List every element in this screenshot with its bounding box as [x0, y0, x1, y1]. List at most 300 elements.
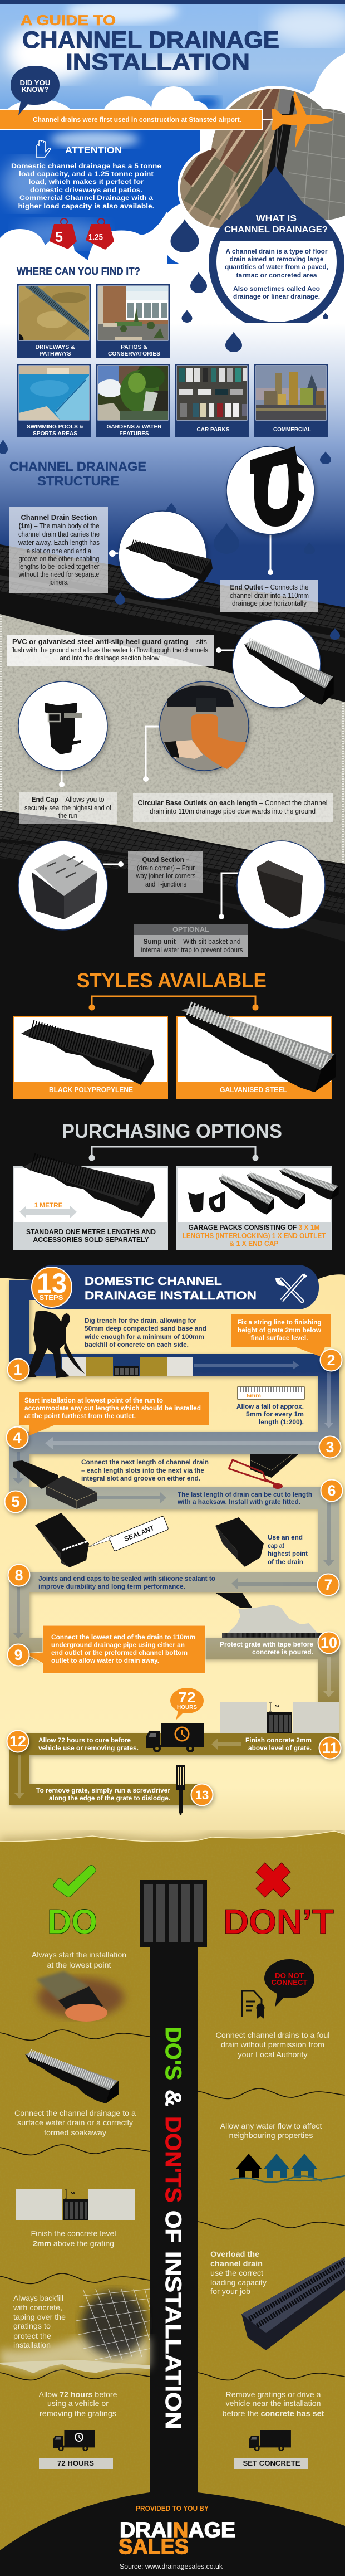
heading: WHAT IS [256, 214, 297, 223]
hacksaw cutting a length [229, 1454, 298, 1489]
text panel: channel drain section: joiners. [49, 578, 69, 586]
caption: BLACK POLYPROPYLENE [49, 1085, 133, 1094]
heading: channel drainage structure: CHANNEL DRAINAGE [9, 459, 146, 474]
don't: foul drain: your Local Authority [238, 2050, 307, 2059]
step 1 text [84, 1317, 206, 1348]
step 6 text [177, 1491, 312, 1506]
icon: screwdriver [176, 1765, 185, 1815]
do: backfill mesh photo [0, 2289, 150, 2373]
do: start at lowest point: at the lowest point [47, 1960, 111, 1969]
attention panel [11, 140, 161, 210]
step 1 text: backfill of concrete on each side. [85, 1341, 189, 1348]
caption: CAR PARKS [197, 426, 229, 433]
step 1 text: wide enough for a minimum of 100mm [84, 1333, 204, 1341]
heading: don't: DON’T [223, 1903, 334, 1941]
text panel: channel drain section: water away. Each length has [18, 539, 100, 547]
title: A GUIDE TO [21, 13, 116, 28]
do: galvanised channel [25, 2052, 119, 2103]
icon: truck [249, 2430, 291, 2451]
ruler: 5mm [247, 1392, 261, 1399]
do: backfill text: Always backfill [13, 2293, 63, 2302]
don't: overload text: use the correct [210, 2268, 263, 2277]
caption: PATIOS & [121, 344, 147, 350]
icon: green tick [53, 1866, 96, 1897]
logo: DRAINAGE [120, 2519, 235, 2542]
icon: weight 5 tonne: 5 [55, 230, 63, 245]
caption: SPORTS AREAS [33, 430, 77, 437]
sealant tube [109, 1516, 169, 1551]
photo [98, 286, 168, 340]
step 11 text [245, 1736, 312, 1752]
panel: what is channel drainage: CHANNEL DRAINAGE? [224, 225, 328, 235]
text panel: end outlet: channel drain into a 110mm [230, 592, 309, 600]
step 4 callout [19, 1392, 209, 1436]
text panel: grating [7, 635, 214, 666]
provided by: PROVIDED TO YOU BY [136, 2505, 209, 2512]
don't: foul drain [216, 2030, 329, 2059]
do: backfill text: with concrete, [13, 2303, 62, 2312]
finished concrete cross-section [220, 1702, 339, 1733]
step 10 text: concrete is poured. [252, 1648, 313, 1656]
do: surface water text [14, 2108, 136, 2137]
attention text: Commercial Channel Drainage with a [19, 194, 153, 202]
step 2 callout [231, 1314, 331, 1357]
step 12 text: vehicle use or removing grates. [38, 1744, 139, 1752]
central grate column [140, 1880, 207, 2499]
drains [219, 1176, 274, 1215]
do: backfill text: protect the [13, 2331, 51, 2340]
sump unit text [141, 938, 243, 954]
photo [256, 366, 326, 420]
attention text: Domestic channel drainage has a 5 tonne [11, 162, 161, 170]
icon: aeroplane [263, 91, 333, 149]
card: garage packs [176, 1166, 339, 1250]
caption: SWIMMING POOLS & [27, 423, 83, 430]
do: 72 hours text: using a vehicle or [47, 2399, 109, 2408]
sealant illustration [35, 1513, 169, 1567]
do: drain photo [36, 1971, 124, 2022]
badge: 13 steps: STEPS [39, 1294, 63, 1302]
icon: weight 1.25 tonne [86, 218, 114, 250]
footer [0, 2492, 345, 2576]
caption: STANDARD ONE METRE LENGTHS AND [26, 1228, 156, 1236]
step 10 text: Protect grate with tape before [220, 1640, 313, 1648]
caption: GARDENS & WATER [107, 423, 162, 430]
step number badges: 6 [327, 1482, 336, 1499]
caption: COMMERCIAL [273, 426, 312, 433]
step 9 callout: underground drainage pipe using either an [51, 1641, 185, 1649]
do: start at lowest point [32, 1950, 126, 1969]
step 6 text: The last length of drain can be cut to length [178, 1491, 312, 1498]
icon: certificate [242, 1991, 264, 2017]
step 12 text [38, 1736, 139, 1752]
step 9 callout: Connect the lowest end of the drain to 110mm [51, 1633, 195, 1641]
title [85, 1275, 257, 1302]
do: start at lowest point: Always start the installation [32, 1950, 126, 1959]
card: patios and conservatories [96, 284, 170, 358]
step 7 text: Use an end [268, 1533, 303, 1541]
source: Source: www.drainagesales.co.uk [120, 2562, 223, 2570]
heading: purchasing options: PURCHASING OPTIONS [62, 1121, 282, 1142]
bracket: styles [90, 996, 258, 1010]
dirt section background [0, 1831, 345, 2576]
caption [27, 423, 83, 437]
concrete pour on grate [215, 1593, 322, 1638]
step 2 callout: Fix a string line to finishing [237, 1318, 322, 1326]
component: end outlet [226, 446, 314, 575]
card: car parks [175, 364, 249, 437]
caption: ACCESSORIES SOLD SEPARATELY [33, 1236, 149, 1244]
step 7 text: cap at [268, 1542, 284, 1550]
caption: CONSERVATORIES [108, 350, 160, 357]
step 9 callout [24, 1625, 205, 1673]
don't: set concrete text: vehicle near the installation [226, 2399, 321, 2408]
installation path [9, 1280, 339, 1805]
water drops [170, 219, 328, 323]
photo [98, 366, 168, 420]
do: backfill text: taping over the [13, 2312, 66, 2321]
vertical title: OF [161, 2210, 185, 2243]
step 5 text: – each length slots into the next via the [81, 1467, 204, 1474]
caption [26, 1228, 156, 1244]
concrete section background [0, 613, 345, 869]
card: commercial [254, 364, 328, 437]
photo [177, 366, 247, 420]
don't: do not connect bubble: DO NOT [275, 1972, 304, 1980]
ruler [238, 1387, 304, 1399]
step 2 callout: height of grate 2mm below [238, 1326, 322, 1334]
text panel: end cap: the run [58, 812, 77, 820]
step 7 text: of the drain [268, 1558, 303, 1566]
icon: flooded houses [230, 2154, 345, 2182]
trench cross-section [62, 1357, 193, 1376]
step number badges: 13 [195, 1788, 209, 1802]
don't: overload text [210, 2249, 267, 2296]
label: set concrete [234, 2458, 308, 2469]
vertical title: & [161, 2090, 185, 2106]
card: galvanised steel [176, 1006, 336, 1099]
don't: overload text: for your job [210, 2287, 250, 2296]
vertical title: DO'S [161, 2027, 185, 2080]
panel: optional sump unit [134, 924, 248, 957]
step 4 callout: accommodate any cut lengths which should be installed [24, 1404, 201, 1412]
end outlet [209, 1191, 225, 1212]
step number badges [4, 1350, 343, 1805]
text panel: circular base outlets: drain into 110m drainage pipe downwards into the ground [150, 807, 316, 815]
logo: SALES [119, 2535, 189, 2559]
definition text: drain aimed at removing large [229, 255, 324, 263]
text panel: grating: and into the drainage section below [60, 654, 160, 662]
step number badges: 12 [9, 1733, 26, 1750]
sump unit text: Sump unit – With silt basket and [144, 938, 241, 946]
step 6 text: with a hacksaw. Install with grate fitted. [177, 1498, 300, 1506]
text panel: channel drain section: a slot on one end and a [27, 547, 91, 555]
title: DOMESTIC CHANNEL [85, 1275, 222, 1288]
step 13 text: To remove grate, simply run a screwdriver [36, 1786, 170, 1794]
text panel: circular base outlets: Circular Base Outlets on each length – Connect the channel [138, 799, 327, 807]
black background lower [0, 811, 345, 1293]
step number badges: 5 [11, 1493, 20, 1510]
text panel: circular base outlets [133, 793, 333, 822]
black drain band upper [0, 544, 345, 708]
step number badges: 2 [327, 1352, 336, 1369]
vertical title [161, 2027, 185, 2429]
definition text: Also sometimes called Aco [233, 285, 320, 293]
finished concrete cross-section: 2 [273, 1705, 279, 1708]
vertical title: DON'TS [161, 2116, 185, 2203]
do: finish concrete text [31, 2229, 116, 2248]
attention text: domestic driveways and patios. [30, 186, 142, 194]
text panel: end cap: securely seal the highest end of [24, 804, 111, 812]
title: CHANNEL DRAINAGE [22, 27, 279, 53]
text panel: quad section: and T-junctions [145, 880, 186, 888]
don't: overload text: loading capacity [210, 2278, 267, 2287]
path arrows [13, 1361, 334, 1799]
don't: overload text: Overload the [210, 2249, 259, 2258]
heading: do: DO [47, 1903, 97, 1941]
step 3 text: length (1:200). [259, 1418, 304, 1426]
step 4 callout: Start installation at lowest point of the run to [24, 1396, 163, 1404]
step number badges: 1 [13, 1361, 22, 1378]
don't: do not connect bubble: CONNECT [272, 1979, 308, 1986]
title: DRAINAGE INSTALLATION [85, 1289, 257, 1302]
one metre label: 1 METRE [34, 1201, 62, 1209]
step number badges: 8 [14, 1567, 23, 1584]
drain [181, 1006, 336, 1092]
sump unit text: internal water trap to prevent odours [141, 946, 243, 954]
step number badges: 4 [13, 1429, 22, 1446]
text panel: quad section: way joiner for corners [136, 872, 196, 880]
heading: styles available: STYLES AVAILABLE [77, 969, 267, 992]
page gradient background [0, 323, 345, 825]
do: finish concrete text: Finish the concrete level [31, 2229, 116, 2238]
step 11 text: above level of grate. [248, 1744, 312, 1752]
text panel: grating: PVC or galvanised steel anti-slip heel guard grating – sits [12, 638, 207, 646]
clouds above banner [2, 86, 209, 140]
definition text: quantities of water from a paved, [225, 263, 328, 271]
label: set concrete: SET CONCRETE [243, 2460, 300, 2467]
text panel: end outlet [220, 580, 318, 612]
do: surface water text: formed soakaway [44, 2128, 106, 2137]
wavy dividers [0, 2030, 345, 2380]
section: hero sky [0, 0, 345, 334]
icon: truck with clock [53, 2430, 95, 2451]
icon: red cross [256, 1863, 290, 1897]
step 1 text: Dig trench for the drain, allowing for [85, 1317, 196, 1324]
caption: GALVANISED STEEL [220, 1085, 287, 1094]
label: 72 hours: 72 HOURS [57, 2460, 94, 2467]
step 11 text: Finish concrete 2mm [245, 1736, 312, 1744]
text panel: end cap [19, 792, 117, 824]
vertical title: INSTALLATION [161, 2251, 185, 2429]
step number badges: 3 [326, 1439, 334, 1455]
do: 72 hours text [39, 2390, 117, 2418]
caption: GARAGE PACKS CONSISTING OF 3 X 1M [188, 1224, 319, 1231]
card: black polypropylene [13, 1016, 168, 1099]
text panel: channel drain section: lengths to be locked together [19, 563, 99, 571]
don't: foul drain: drain without permission from [221, 2040, 324, 2049]
bracket: purchasing [90, 1147, 258, 1160]
step 2 callout: final surface level. [250, 1334, 308, 1342]
don't: do not connect bubble [264, 1959, 314, 2007]
component: quad section [18, 841, 124, 930]
definition text: A channel drain is a type of floor [226, 247, 328, 255]
badge: 13 steps: 13 [37, 1268, 67, 1299]
text panel: channel drain section: groove on the other, enabling [19, 555, 100, 563]
attention text: higher load capacity is also available. [18, 202, 155, 210]
component: circular base outlet [143, 681, 249, 782]
text panel: channel drain section: (1m) – The main body of the [19, 522, 100, 530]
do: backfill text: installation [13, 2340, 51, 2349]
banner text: Channel drains were first used in construction at Stansted airport. [33, 116, 241, 124]
do: finish concrete text: 2mm above the grating [33, 2239, 114, 2248]
step number badges: 11 [322, 1740, 338, 1756]
text panel: channel drain section [9, 507, 108, 593]
caption: LENGTHS (INTERLOCKING) 1 X END OUTLET [183, 1232, 326, 1240]
definition text: drainage or linear drainage. [233, 293, 320, 300]
step 1 text: 50mm deep compacted sand base and [85, 1324, 206, 1332]
attention heading: ATTENTION [65, 145, 122, 155]
bubble: 72 hours: HOURS [177, 1704, 197, 1711]
title [21, 13, 279, 75]
step 4 callout: at the point furthest from the outlet. [24, 1412, 136, 1420]
step 13 text [36, 1786, 170, 1802]
label: 72 hours [39, 2458, 113, 2469]
card: driveways and pathways [17, 284, 91, 358]
don't: neighbouring properties text: Allow any water flow to affect [220, 2121, 322, 2130]
did you know bubble: KNOW? [22, 86, 48, 94]
logo [119, 2519, 235, 2559]
heading: channel drainage structure [9, 459, 146, 488]
component: end cap [18, 681, 107, 787]
attention text: load capacity, and a 1.25 tonne point [19, 170, 154, 178]
do: backfill text [13, 2293, 66, 2349]
end cap illustration [215, 1517, 264, 1567]
step 9 callout: end outlet or the preformed channel bottom [51, 1649, 188, 1657]
step 12 text: Allow 72 hours to cure before [38, 1736, 131, 1744]
step 8 text: Joints and end caps to be sealed with silicone sealant to [38, 1575, 215, 1582]
bubble: 72 hours [170, 1688, 204, 1720]
caption: PATHWAYS [39, 350, 71, 357]
card: gardens and water features [96, 364, 170, 437]
attention text: load, which makes it perfect for [29, 178, 144, 186]
text panel: quad section: (drain corner) – Four [137, 864, 195, 872]
text panel: channel drain section: Channel Drain Section [21, 514, 97, 522]
text panel: channel drain section: without the need for separate [18, 571, 100, 578]
text panel: quad section [128, 851, 203, 893]
photo [19, 286, 89, 340]
drain [22, 1157, 155, 1218]
text panel: quad section: Quad Section – [142, 856, 190, 864]
do: finish level diagram [16, 2189, 135, 2220]
text panel: grating: flush with the ground and allows the water to flow through the channels [11, 646, 208, 654]
step 7 text: highest point [268, 1550, 308, 1557]
beige installation background [0, 1274, 345, 1850]
don't: set concrete text: before the concrete has set [223, 2409, 324, 2418]
icon: weight 1.25 tonne: 1.25 [88, 233, 103, 242]
caption [108, 344, 160, 357]
step 9 callout: outlet to allow water to drain away. [51, 1657, 159, 1664]
do: 72 hours text: removing the gratings [40, 2409, 116, 2418]
step 3 text: 5mm for every 1m [246, 1410, 304, 1418]
don't: neighbouring properties text: neighbouring properties [229, 2131, 313, 2140]
one metre arrow [19, 1206, 77, 1218]
don't: heavy duty channel [241, 2257, 345, 2350]
card: standard lengths [13, 1157, 168, 1250]
badge: 13 steps [32, 1267, 72, 1307]
don't: foul drain: Connect channel drains to a foul [216, 2030, 329, 2039]
caption [107, 423, 162, 437]
definition text [225, 247, 328, 300]
don't: neighbouring properties text [220, 2121, 322, 2140]
blue panel background [0, 48, 345, 334]
caption [36, 344, 75, 357]
drain [21, 1024, 154, 1085]
step number badges: 9 [14, 1647, 23, 1663]
step 5 text: Connect the next length of channel drain [81, 1458, 209, 1466]
caption: & 1 X END CAP [229, 1240, 278, 1248]
do: finish level diagram: 2 [69, 2192, 75, 2195]
text panel: end outlet: End Outlet – Connects the [230, 583, 309, 591]
caption: DRIVEWAYS & [36, 344, 75, 350]
step 5 text [81, 1458, 209, 1482]
photo cloud: brick wall and channel drain [178, 86, 345, 228]
caption [183, 1224, 326, 1248]
panel: what is channel drainage [209, 166, 344, 330]
caption: FEATURES [119, 430, 149, 437]
do: surface water text: Connect the channel drainage to a [14, 2108, 136, 2117]
step 8 text [38, 1575, 215, 1590]
heading: where can you find it: WHERE CAN YOU FIND IT? [17, 266, 140, 277]
do: 72 hours text: Allow 72 hours before [39, 2390, 117, 2399]
step 10 text [220, 1640, 313, 1656]
step 7 text [268, 1533, 308, 1566]
step number badges: 10 [321, 1634, 337, 1651]
don't: set concrete text [223, 2390, 324, 2418]
attention text [11, 162, 161, 210]
definition text: tarmac or concreted area [236, 271, 317, 279]
title: INSTALLATION [66, 49, 250, 75]
icon: weight 5 tonne [50, 218, 77, 249]
don't: overload text: channel drain [210, 2259, 263, 2268]
step 13 text: along the edge of the grate to dislodge. [49, 1794, 170, 1802]
photo [19, 366, 89, 420]
component: channel drain section [109, 511, 213, 599]
figure: man digging [28, 1311, 85, 1378]
card: swimming pools and sports areas [17, 364, 91, 437]
bubble: 72 hours: 72 [178, 1689, 196, 1706]
do: backfill text: gratings to [13, 2321, 51, 2330]
step 3 text [236, 1403, 304, 1426]
heading: channel drainage structure: STRUCTURE [37, 474, 119, 488]
channel lengths connecting [13, 1460, 97, 1509]
don't: set concrete text: Remove gratings or drive a [226, 2390, 321, 2399]
end cap [188, 1192, 204, 1212]
text panel: end outlet: drainage pipe horizontally [232, 600, 307, 607]
step number badges: 7 [324, 1576, 333, 1593]
step 3 text: Allow a fall of approx. [236, 1403, 304, 1410]
do: surface water text: surface water drain or a correctly [17, 2118, 133, 2127]
component: sump unit [219, 841, 325, 929]
did you know bubble [11, 66, 60, 115]
text panel: channel drain section: channel drain that carries the [18, 530, 100, 538]
icon: hand [37, 140, 51, 158]
sealant tube: SEALANT [123, 1524, 156, 1543]
did you know bubble: DID YOU [20, 79, 50, 87]
optional label: OPTIONAL [172, 926, 209, 933]
drop [225, 332, 242, 352]
water drops in structure [0, 439, 340, 640]
